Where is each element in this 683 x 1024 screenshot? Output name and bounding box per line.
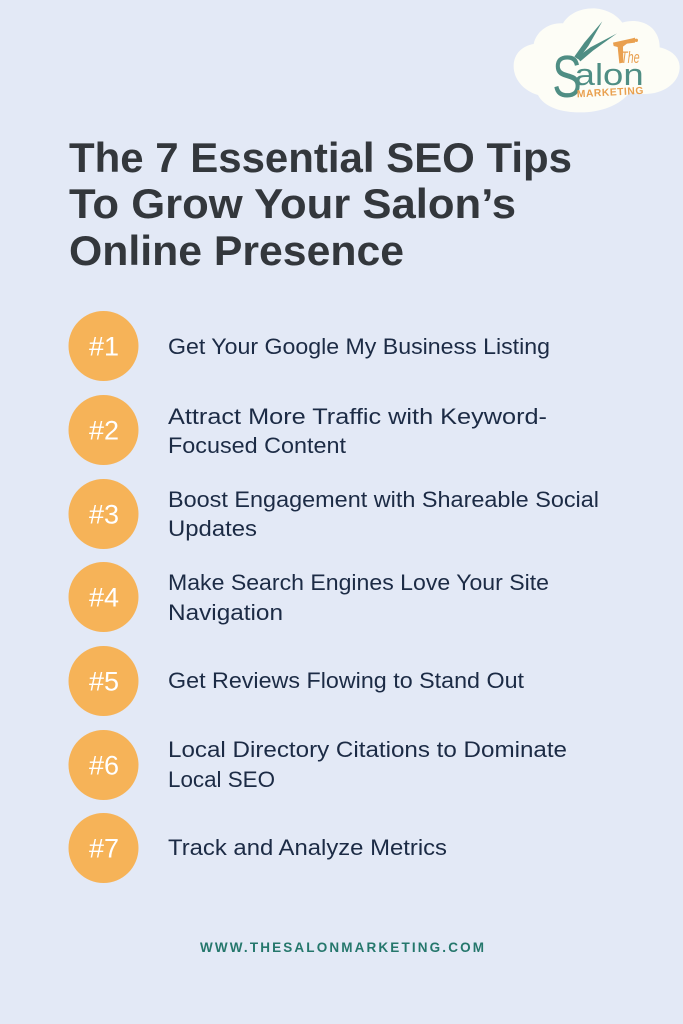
number 3: #3 xyxy=(89,500,119,530)
tip 6 xyxy=(68,730,567,800)
tip 1 xyxy=(68,311,550,381)
logo word: The: The xyxy=(621,48,640,67)
number badge 4 xyxy=(68,562,138,632)
tip 4 text: Make Search Engines Love Your Site xyxy=(168,570,549,595)
tip 2 text xyxy=(168,404,547,458)
tip 1 text: Get Your Google My Business Listing xyxy=(168,334,550,359)
tip 6 text: Local SEO xyxy=(168,767,275,792)
tip 2 xyxy=(68,395,547,465)
tip 3 text: Boost Engagement with Shareable Social xyxy=(168,487,599,512)
number badge 2 xyxy=(68,395,138,465)
number 5: #5 xyxy=(89,666,119,696)
tip 7 xyxy=(68,813,447,883)
tip 5 xyxy=(68,646,524,716)
number badge 5 xyxy=(68,646,138,716)
number 1: #1 xyxy=(89,332,119,362)
title xyxy=(69,134,572,274)
number badge 3 xyxy=(68,479,138,549)
title: To Grow Your Salon’s xyxy=(69,180,516,227)
logo word: Salon S: S xyxy=(552,43,582,110)
logo hair dryer xyxy=(613,38,638,63)
tip 4 text: Navigation xyxy=(168,600,283,625)
tip 7 text: Track and Analyze Metrics xyxy=(168,835,447,860)
tip 3 xyxy=(68,479,599,549)
logo word: alon: alon xyxy=(575,58,644,92)
number 6: #6 xyxy=(89,750,119,780)
tip 2 text: Attract More Traffic with Keyword- xyxy=(168,404,547,429)
tip 3 text xyxy=(168,487,599,541)
title: The 7 Essential SEO Tips xyxy=(69,134,572,181)
logo: The Salon Marketing xyxy=(514,8,680,112)
website footer: WWW.THESALONMARKETING.COM xyxy=(200,940,484,955)
tip 6 text xyxy=(168,737,567,792)
tip 4 text xyxy=(168,570,549,625)
tip 5 text: Get Reviews Flowing to Stand Out xyxy=(168,668,524,693)
tip 6 text: Local Directory Citations to Dominate xyxy=(168,737,567,762)
tip 4 xyxy=(68,562,549,632)
number badge 6 xyxy=(68,730,138,800)
number 4: #4 xyxy=(89,582,119,612)
tip 2 text: Focused Content xyxy=(168,433,346,458)
tip 3 text: Updates xyxy=(168,516,257,541)
logo scissors xyxy=(574,21,617,61)
number 2: #2 xyxy=(89,416,119,446)
logo word: Marketing: MARKETING xyxy=(577,86,644,100)
number badge 7 xyxy=(68,813,138,883)
logo cloud xyxy=(514,8,680,112)
number 7: #7 xyxy=(89,834,119,864)
number badge 1 xyxy=(68,311,138,381)
title: Online Presence xyxy=(69,227,404,274)
